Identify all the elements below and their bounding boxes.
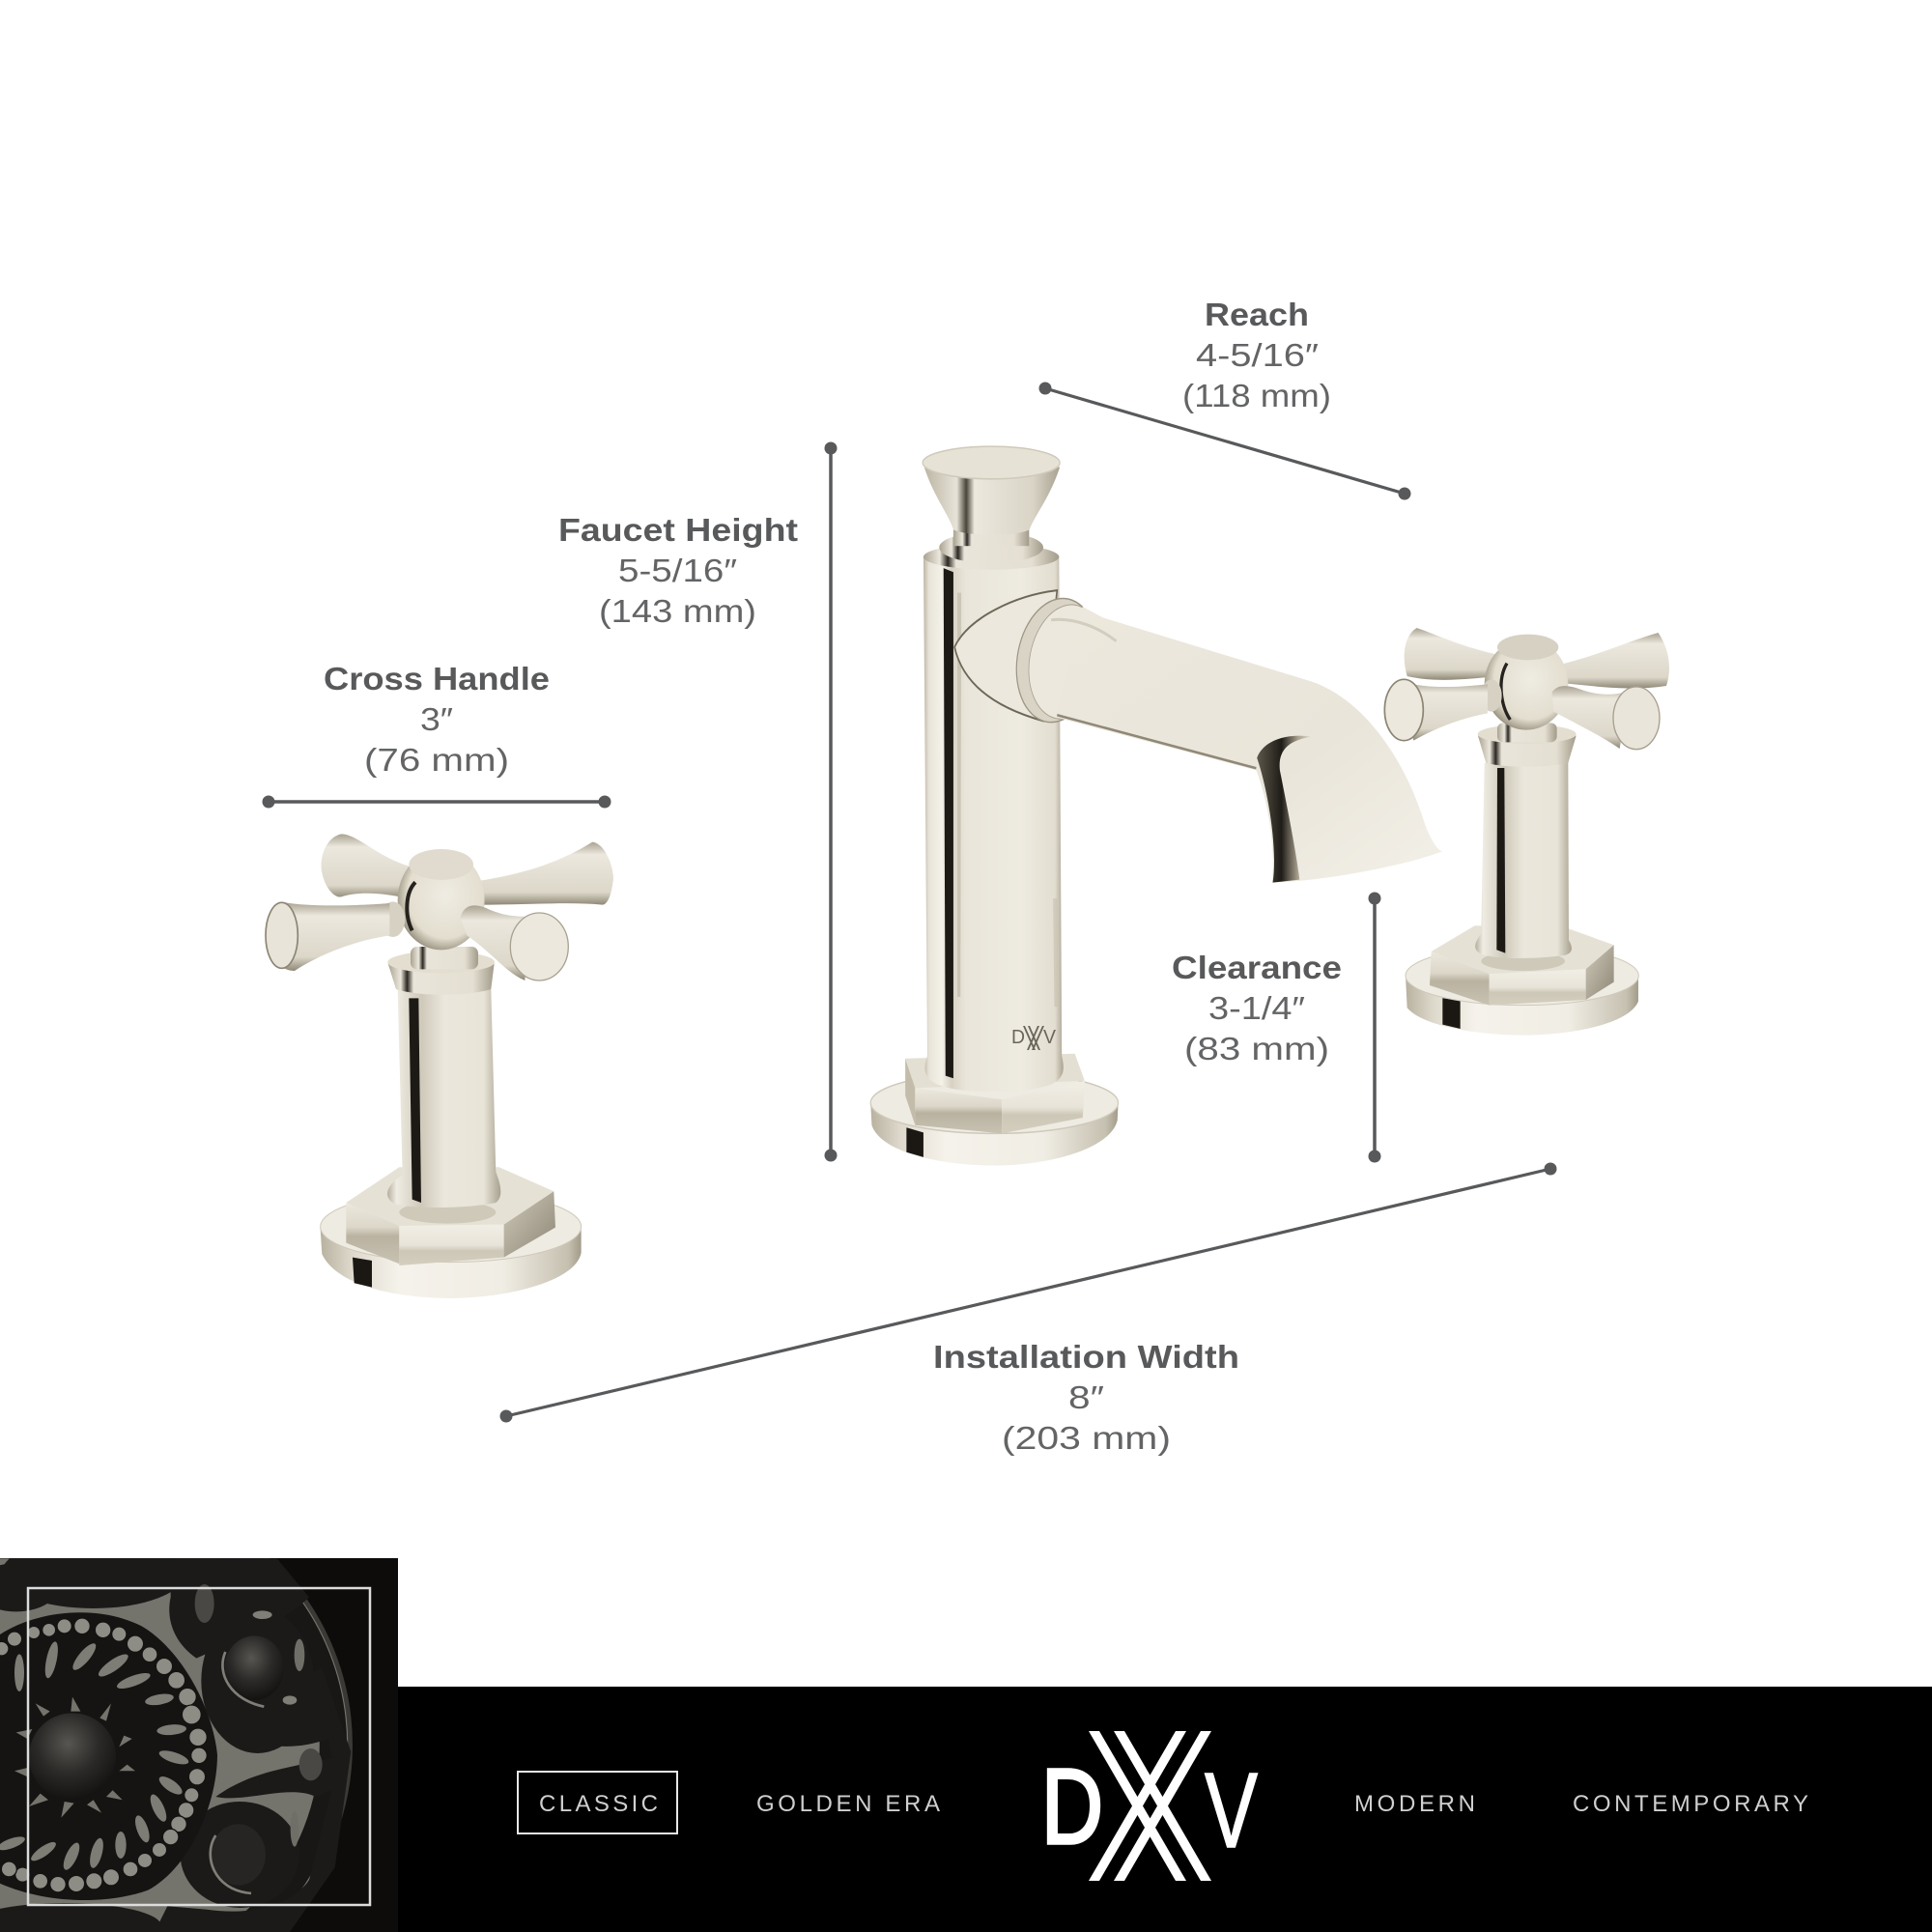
dimension: faucet height: 5-5/16″: [618, 553, 737, 588]
right handle stem: [1475, 723, 1577, 958]
faucet base disc: [870, 1072, 1119, 1166]
dimension: reach: [1039, 297, 1410, 500]
top cap: [923, 446, 1060, 535]
right handle base: [1406, 925, 1638, 1036]
style nav: contemporary: CONTEMPORARY: [1573, 1791, 1808, 1817]
dimension: clearance: 3-1/4″: [1208, 990, 1305, 1026]
small DXV mark on faucet body: [1011, 1026, 1057, 1050]
inner frame: [28, 1588, 370, 1905]
central faucet and spout: [870, 446, 1442, 1166]
medallion scroll balls: [211, 1635, 284, 1893]
style nav: golden era: GOLDEN ERA: [756, 1791, 940, 1817]
dimension: faucet height: [558, 442, 837, 1161]
dimension: reach: (118 mm): [1182, 378, 1331, 413]
small DXV mark on faucet body: D: [1011, 1027, 1025, 1048]
logo: DXV: [1041, 1731, 1258, 1881]
medallion leaves: [0, 1640, 190, 1872]
spout: [954, 585, 1442, 883]
medallion scrolls: [0, 1538, 351, 1932]
medallion light glints: [195, 1584, 323, 1847]
dimension: reach: 4-5/16″: [1196, 337, 1319, 373]
medallion central knob: [14, 1697, 135, 1818]
left handle stem: [387, 947, 500, 1208]
dimension: cross handle: Cross Handle: [324, 661, 550, 696]
dimension: reach: Reach: [1205, 297, 1309, 332]
left cross handle: [266, 834, 613, 1298]
dimension: faucet height: (143 mm): [599, 593, 756, 629]
small DXV mark on faucet body: V: [1043, 1027, 1057, 1048]
medallion bead ring: [0, 1618, 207, 1892]
dimension: installation width: (203 mm): [1002, 1420, 1171, 1456]
collar under the top cap: [923, 526, 1059, 570]
dimension: faucet height: Faucet Height: [558, 512, 798, 548]
dimension: clearance: [1172, 893, 1381, 1163]
dimension: installation width: Installation Width: [933, 1339, 1239, 1375]
right cross handle: [1384, 628, 1669, 1036]
dimension: cross handle: (76 mm): [364, 742, 509, 778]
faucet body column: [923, 555, 1064, 1092]
left handle base: [321, 1167, 582, 1298]
ornamental medallion: [0, 1558, 353, 1932]
dimension: cross handle: [263, 661, 611, 808]
right handle arms: [1384, 628, 1669, 750]
medallion central dark field: [0, 1612, 217, 1900]
style nav: modern: MODERN: [1354, 1791, 1475, 1817]
dimension: installation width: [500, 1163, 1557, 1456]
dimension: clearance: Clearance: [1172, 950, 1342, 985]
dimension: clearance: (83 mm): [1184, 1031, 1329, 1066]
left handle arms: [266, 834, 613, 980]
dimension: cross handle: 3″: [420, 701, 453, 737]
logo: DXV: V: [1205, 1751, 1258, 1870]
logo: DXV: D: [1041, 1747, 1103, 1866]
faucet hex nut: [905, 1054, 1085, 1133]
dimension: installation width: 8″: [1068, 1379, 1104, 1415]
ornament panel: [0, 1558, 398, 1932]
black footer band: [398, 1687, 1932, 1932]
style nav: classic selected: [518, 1772, 677, 1833]
style nav: classic selected: CLASSIC: [539, 1791, 658, 1817]
